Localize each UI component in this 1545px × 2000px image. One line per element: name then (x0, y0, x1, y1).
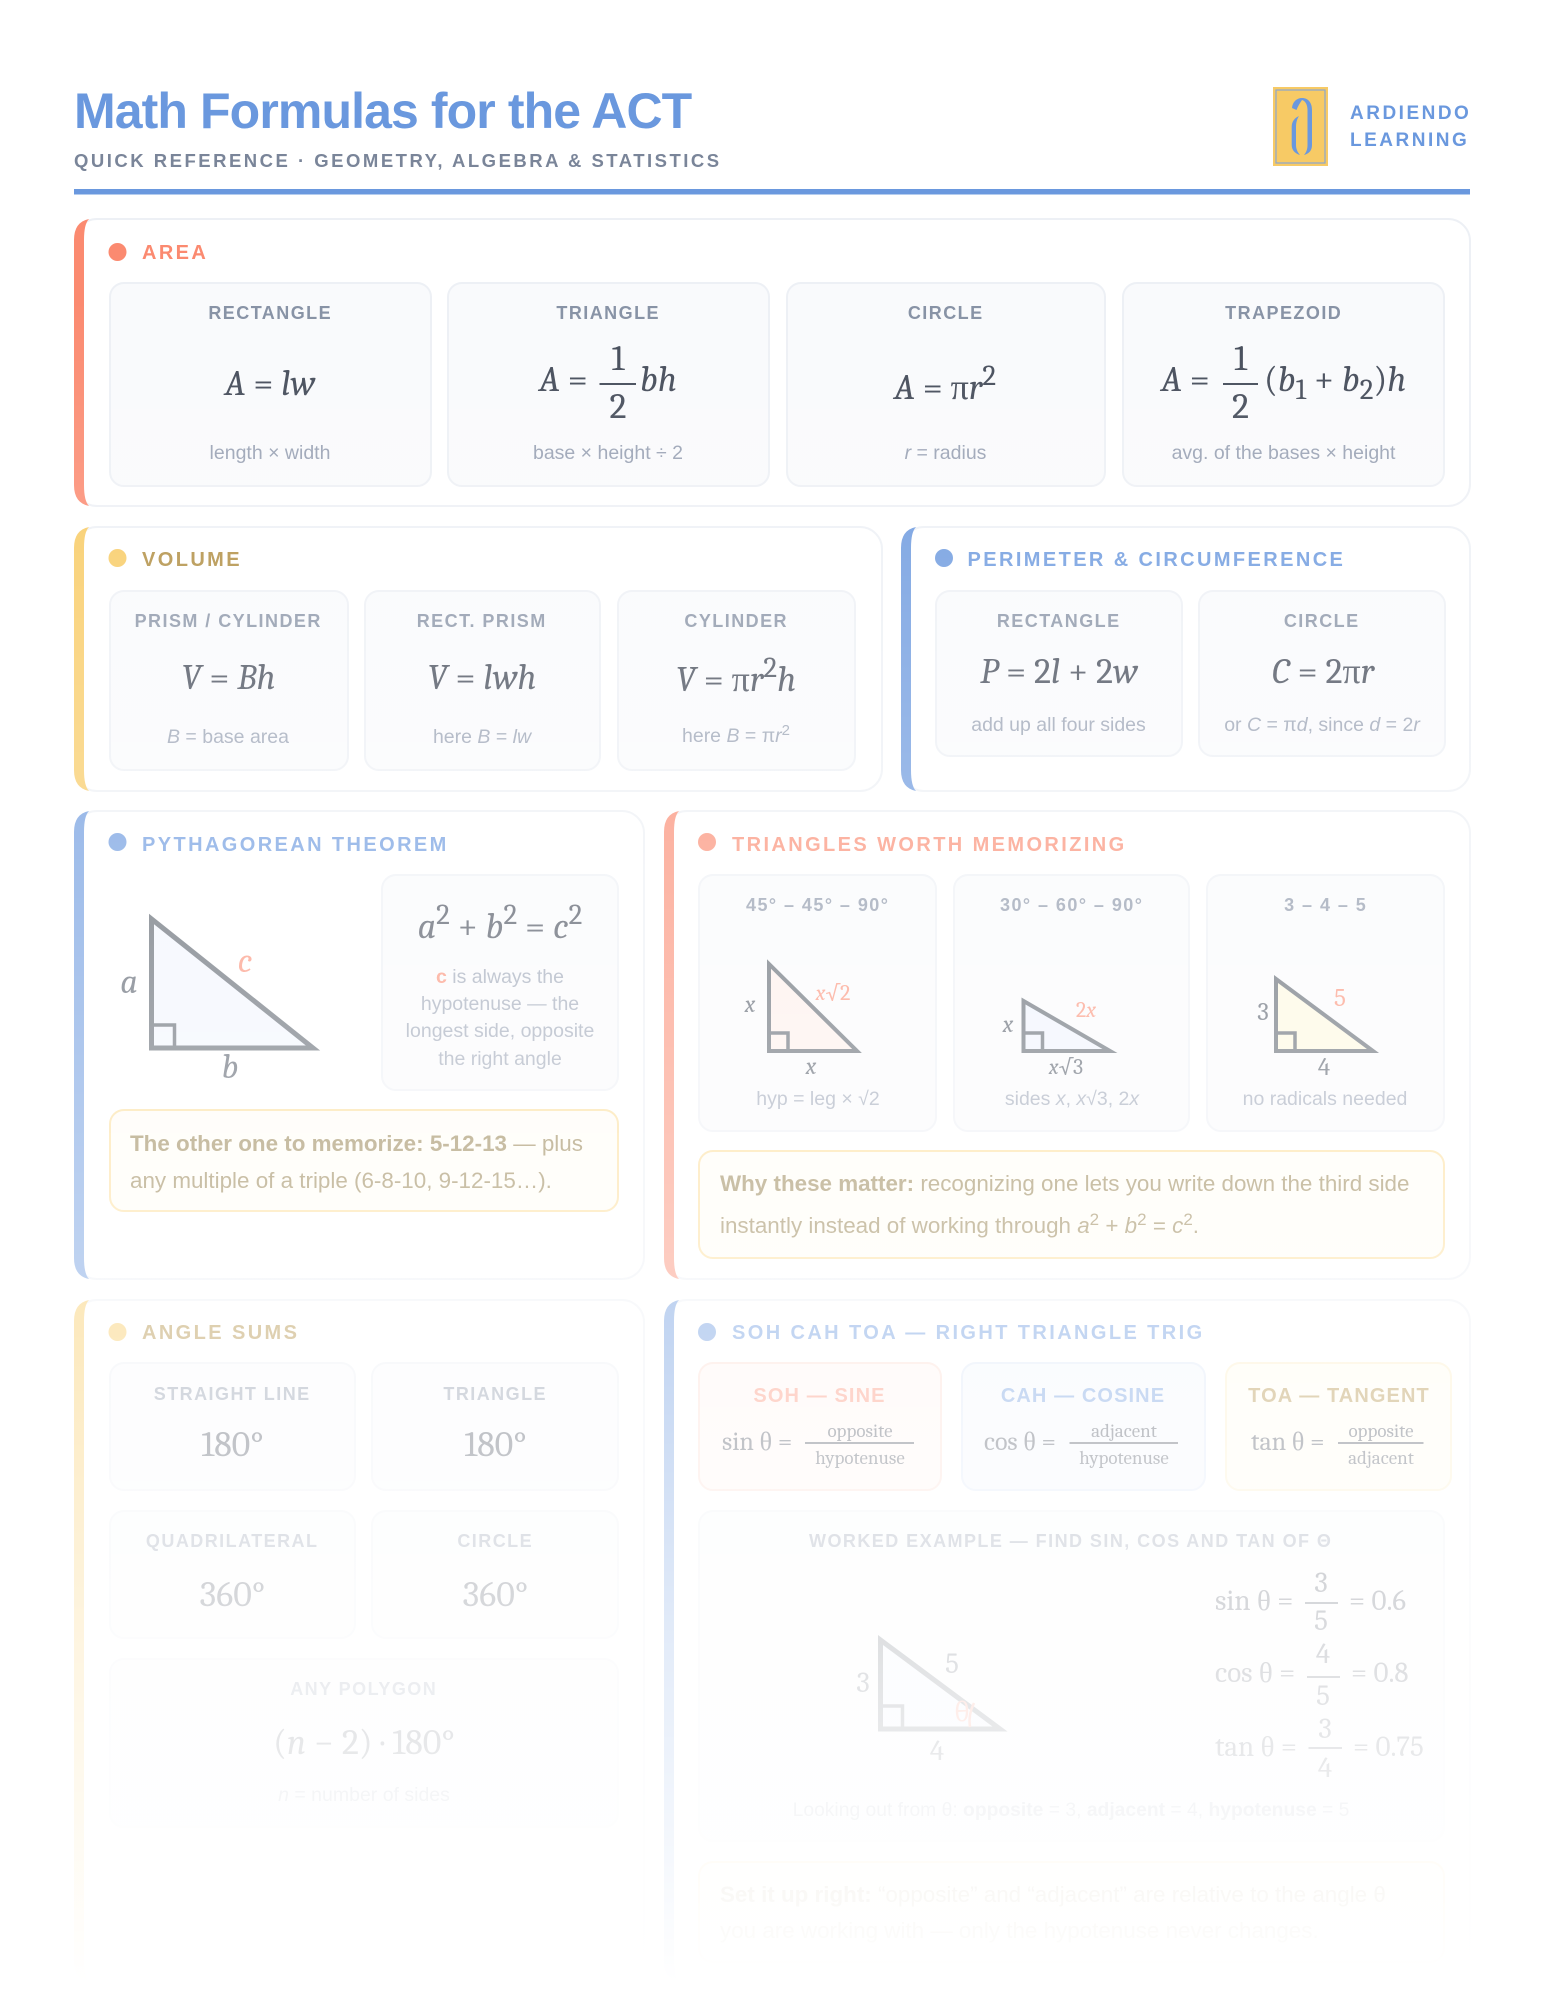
card: rectangle: A = lw (223, 363, 316, 404)
header (74, 83, 1471, 194)
card: trapezoid: b (1342, 359, 1360, 400)
card: circle circumference: C = 2πr (1272, 651, 1376, 692)
card: cylinder: here B = πr (682, 725, 782, 747)
diagram: right triangle a b c: a (120, 962, 138, 1002)
card: 45 45 90: x√2 (815, 980, 850, 1006)
card: formula: 2 (569, 899, 582, 932)
panel: angle sums (74, 1300, 644, 1982)
heading: angle sums: ANGLE SUMS (142, 1322, 299, 1344)
callout: set it up right: Set it up right: “opposite” and “adjacent” are relative to the angle θ (720, 1882, 1386, 1907)
worked formulas (1215, 1567, 1424, 1785)
card: rect. prism: V = lwh (428, 657, 536, 698)
worked formulas: 4 (1316, 1638, 1330, 1671)
card: trapezoid: 1 (1296, 374, 1307, 407)
card: 30 60 90: 2x (1076, 997, 1096, 1023)
callout: why these matter: 2 (1090, 1210, 1099, 1229)
callout: why these matter: b (1125, 1213, 1137, 1238)
callout: set it up right: you are working with — only the hypotenuse never changes. (720, 1918, 1319, 1943)
heading: triangles: TRIANGLES WORTH MEMORIZING (732, 834, 1127, 856)
card: triangle angle sum: 180° (464, 1424, 527, 1465)
callout: why these matter: . (1193, 1213, 1199, 1238)
worked formulas: sin θ = (1215, 1585, 1293, 1618)
heading: perimeter: PERIMETER & CIRCUMFERENCE (968, 549, 1345, 571)
callout: why these matter: Why these matter: recognizing one lets you write down the third side (720, 1171, 1409, 1196)
card: prism / cylinder: PRISM / CYLINDER (135, 611, 322, 631)
card: triangle: base × height ÷ 2 (533, 442, 683, 464)
card: rectangle perimeter: RECTANGLE (997, 611, 1121, 631)
card: triangle: A = (537, 359, 588, 400)
card: formula: the right angle (438, 1048, 562, 1070)
card: worked example: WORKED EXAMPLE — FIND SIN, COS AND TAN OF Θ (809, 1531, 1332, 1551)
card: sine: SOH — SINE (753, 1385, 886, 1407)
icon: Ardiendo logo (1273, 87, 1328, 166)
card: any polygon: (n − 2) · 180° (273, 1722, 455, 1763)
card: formula: b (486, 906, 504, 947)
card: 3 4 5: no radicals needed (1243, 1088, 1407, 1110)
card: trapezoid: 2 (1232, 386, 1249, 427)
card: trapezoid: A = (1159, 359, 1210, 400)
title: Math Formulas for the ACT (74, 83, 692, 139)
card: 3 4 5: 3 – 4 – 5 (1284, 895, 1367, 915)
worked formulas: = 0.6 (1349, 1585, 1406, 1618)
card: 30 60 90: x (1002, 1010, 1014, 1038)
card: sine: hypotenuse (815, 1447, 905, 1469)
heading: soh cah toa: SOH CAH TOA — RIGHT TRIANGLE TRIG (732, 1322, 1205, 1344)
card: any polygon (110, 1659, 618, 1827)
card: circle (787, 283, 1105, 486)
card: worked example (699, 1511, 1444, 1841)
card: cosine (962, 1363, 1205, 1490)
callout: why these matter (699, 1151, 1444, 1258)
card: triangle angle sum: TRIANGLE (443, 1384, 547, 1404)
card: cylinder: CYLINDER (684, 611, 788, 631)
card: prism / cylinder (110, 591, 348, 770)
card: circle: CIRCLE (908, 303, 984, 323)
worked formulas: = 0.8 (1351, 1657, 1408, 1690)
card: sine: opposite (827, 1420, 893, 1442)
callout: why these matter: c (1172, 1213, 1183, 1238)
card: formula: 2 (436, 899, 450, 932)
panel: soh cah toa (664, 1300, 1470, 1982)
card: any polygon: n = number of sides (278, 1784, 450, 1806)
card: triangle: TRIANGLE (556, 303, 660, 323)
card: straight line: STRAIGHT LINE (154, 1384, 311, 1404)
card: circle circumference: or C = πd, since d = 2r (1224, 714, 1421, 736)
card: circle angle sum: 360° (463, 1574, 528, 1615)
worked formulas: 5 (1314, 1605, 1328, 1638)
card: trapezoid: 1 (1234, 338, 1248, 379)
card: cosine: CAH — COSINE (1001, 1385, 1165, 1407)
card: cosine: cos θ = (984, 1427, 1056, 1457)
subtitle: QUICK REFERENCE · GEOMETRY, ALGEBRA & STATISTICS (74, 150, 722, 171)
card: formula (382, 875, 618, 1090)
card: rectangle (110, 283, 431, 486)
card: trapezoid (1123, 283, 1444, 486)
worked formulas: 3 (1314, 1567, 1328, 1600)
card: formula: + (450, 906, 486, 947)
callout: why these matter: = (1147, 1213, 1172, 1238)
card: triangle: 1 (611, 338, 625, 379)
card: trapezoid: TRAPEZOID (1225, 303, 1342, 323)
card: cylinder: V = πr (676, 659, 763, 700)
card: circle circumference (1199, 591, 1445, 756)
callout: memorize: any multiple of a triple (6-8-10, 9-12-15…). (130, 1168, 552, 1193)
card: cylinder: h (777, 659, 796, 700)
callout: why these matter: instantly instead of working through a (720, 1213, 1090, 1238)
callout: why these matter: 2 (1183, 1210, 1193, 1229)
worked formulas: 4 (1318, 1752, 1332, 1785)
card: 3 4 5 (1207, 875, 1444, 1131)
diagram: 3 4 5 triangle with theta: 4 (930, 1735, 944, 1768)
callout: why these matter: + (1099, 1213, 1125, 1238)
card: 45 45 90: hyp = leg × √2 (756, 1088, 880, 1110)
card: 3 4 5: 5 (1334, 984, 1346, 1013)
card: trapezoid: + (1306, 359, 1342, 400)
card: 30 60 90: sides x, x√3, 2x (1005, 1088, 1140, 1110)
worked formulas: 5 (1316, 1680, 1330, 1713)
card: rect. prism: here B = lw (433, 726, 533, 748)
heading: area: AREA (142, 242, 208, 264)
card: formula: longest side, opposite (406, 1020, 594, 1042)
diagram: right triangle a b c: c (238, 941, 252, 981)
diagram: right triangle a b c: b (222, 1047, 238, 1087)
diagram: 3 4 5 triangle with theta: 5 (945, 1648, 959, 1681)
card: trapezoid: (b (1264, 359, 1296, 400)
card: 3 4 5: 3 (1257, 998, 1269, 1027)
card: trapezoid: h (1387, 359, 1406, 400)
card: quadrilateral (110, 1511, 355, 1638)
card: formula: c is always the (436, 966, 564, 988)
card: 30 60 90: x√3 (1048, 1054, 1083, 1080)
heading: pythagorean: PYTHAGOREAN THEOREM (142, 834, 449, 856)
diagram: right triangle a b c (120, 919, 313, 1087)
callout: memorize: The other one to memorize: 5-12-13 — plus (130, 1131, 583, 1156)
card: tangent: TOA — TANGENT (1248, 1385, 1430, 1407)
worked formulas: cos θ = (1215, 1657, 1295, 1690)
card: 45 45 90 (699, 875, 936, 1131)
card: cylinder (618, 591, 855, 770)
card: rect. prism (365, 591, 600, 770)
worked formulas: 3 (1318, 1713, 1332, 1746)
card: formula: c (553, 906, 569, 947)
card: circle angle sum: CIRCLE (457, 1531, 533, 1551)
card: 45 45 90: x (805, 1052, 817, 1080)
card: sine (699, 1363, 941, 1490)
card: 45 45 90: 45° – 45° – 90° (746, 895, 889, 915)
card: trapezoid: ) (1373, 359, 1387, 400)
card: straight line (110, 1363, 355, 1490)
panel: volume (74, 527, 882, 791)
logo wordmark: ARDIENDO (1350, 103, 1471, 124)
card: cosine: adjacent (1091, 1420, 1158, 1442)
card: cosine: hypotenuse (1079, 1447, 1169, 1469)
callout: why these matter: 2 (1137, 1210, 1147, 1229)
card: formula: a (418, 906, 436, 947)
card: tangent: opposite (1348, 1420, 1414, 1442)
card: rectangle perimeter (936, 591, 1182, 756)
card: formula: = (517, 906, 553, 947)
card: circle angle sum (372, 1511, 618, 1638)
card: prism / cylinder: V = Bh (181, 657, 276, 698)
card: trapezoid: 2 (1360, 374, 1373, 407)
card: triangle angle sum (372, 1363, 618, 1490)
diagram: 3 4 5 triangle with theta (856, 1640, 1000, 1768)
heading: volume: VOLUME (142, 549, 242, 571)
card: rectangle perimeter: add up all four sides (971, 714, 1146, 736)
header rule (74, 189, 1470, 194)
card: cylinder: 2 (782, 722, 790, 739)
card: worked example: Looking out from θ: opposite = 3, adjacent = 4, hypotenuse = 5 (793, 1800, 1349, 1821)
card: formula: 2 (504, 899, 517, 932)
card: triangle: bh (640, 359, 677, 400)
card: rect. prism: RECT. PRISM (417, 611, 547, 631)
card: trapezoid: avg. of the bases × height (1172, 442, 1396, 464)
card: circle: 2 (982, 360, 996, 393)
card: straight line: 180° (201, 1424, 264, 1465)
card: tangent (1226, 1363, 1451, 1490)
panel: triangles worth memorizing (664, 811, 1470, 1279)
card: sine: sin θ = (722, 1427, 792, 1457)
worked formulas: = 0.75 (1353, 1731, 1424, 1764)
card: 30 60 90: 30° – 60° – 90° (1000, 895, 1143, 915)
card: 3 4 5: 4 (1318, 1053, 1330, 1082)
card: 45 45 90: x (744, 990, 756, 1018)
worked formulas: tan θ = (1215, 1731, 1297, 1764)
logo wordmark: LEARNING (1350, 130, 1469, 151)
panel: perimeter and circumference (901, 527, 1470, 791)
panel: area (74, 219, 1470, 506)
card: any polygon: ANY POLYGON (290, 1679, 437, 1699)
logo wordmark (1350, 103, 1471, 151)
card: cylinder: 2 (763, 652, 777, 685)
diagram: 3 4 5 triangle with theta: θ (954, 1698, 970, 1728)
card: circle: r = radius (905, 442, 987, 464)
card: prism / cylinder: B = base area (167, 726, 289, 748)
card: tangent: adjacent (1348, 1447, 1415, 1469)
card: quadrilateral: 360° (200, 1574, 265, 1615)
callout: memorize (110, 1110, 618, 1211)
card: rectangle perimeter: P = 2l + 2w (980, 651, 1139, 692)
callout: set it up right (699, 1862, 1444, 1962)
card: rectangle: RECTANGLE (208, 303, 332, 323)
card: formula: hypotenuse — the (421, 993, 579, 1015)
card: triangle (448, 283, 769, 486)
diagram: 3 4 5 triangle with theta: 3 (856, 1667, 870, 1700)
card: rectangle: length × width (210, 442, 330, 464)
panel: pythagorean theorem (74, 811, 644, 1279)
card: triangle: 2 (610, 386, 626, 427)
card: tangent: tan θ = (1251, 1427, 1324, 1457)
card: circle: A = πr (894, 367, 982, 408)
card: quadrilateral: QUADRILATERAL (146, 1531, 318, 1551)
card: circle circumference: CIRCLE (1284, 611, 1360, 631)
card: 30 60 90 (954, 875, 1189, 1131)
